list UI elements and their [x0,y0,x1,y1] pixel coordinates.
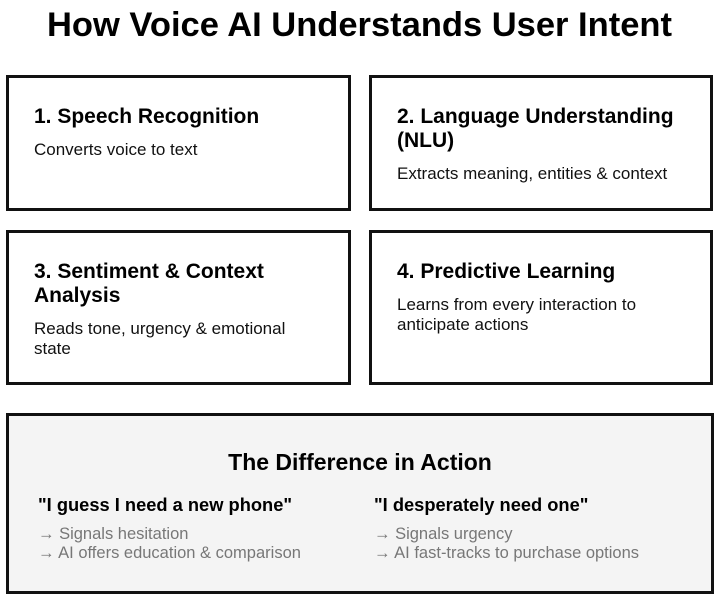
example: hesitation: → Signals hesitation [38,525,188,543]
heading 4: 4. Predictive Learning [397,260,615,283]
text 3: Reads tone, urgency & emotional state [34,319,285,358]
panel: difference in action [6,413,714,594]
text 4: Learns from every interaction to anticipate actions [397,295,636,334]
example: urgency: "I desperately need one" [374,494,588,515]
panel: predictive learning [369,230,713,385]
title: How Voice AI Understands User Intent [47,6,672,44]
text 1: Converts voice to text [34,140,197,159]
example: urgency [374,494,639,562]
example: hesitation: → AI offers education & comparison [38,544,301,562]
heading 1: 1. Speech Recognition [34,105,259,128]
example: urgency: → Signals urgency [374,525,512,543]
example: hesitation: "I guess I need a new phone" [38,494,292,515]
panel heading: The Difference in Action [228,449,492,475]
heading 2: 2. Language Understanding (NLU) [397,105,674,152]
example: urgency: → AI fast-tracks to purchase options [374,544,639,562]
example: hesitation [38,494,301,562]
panel: language understanding [369,75,713,211]
text 2: Extracts meaning, entities & context [397,164,667,183]
panel: speech recognition [6,75,351,211]
heading 3: 3. Sentiment & Context Analysis [34,260,264,307]
panel: sentiment [6,230,351,385]
